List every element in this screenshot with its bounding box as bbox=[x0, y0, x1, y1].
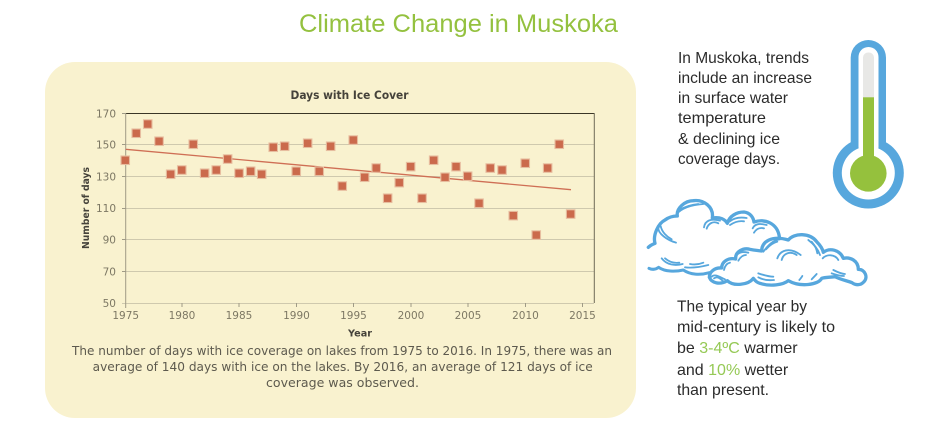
y axis labels: 110 bbox=[96, 203, 116, 215]
scatter chart: days with ice cover bbox=[81, 108, 596, 340]
text block: mid-century outlook: mid-century is likely to bbox=[677, 319, 835, 336]
y axis labels: 150 bbox=[96, 140, 116, 152]
text block: Muskoka trends bbox=[678, 50, 812, 168]
text block: Muskoka trends: temperature bbox=[678, 110, 766, 127]
text block: mid-century outlook: and 10% wetter bbox=[677, 362, 789, 379]
x axis labels: 1985 bbox=[226, 310, 252, 322]
text block: mid-century outlook: than present. bbox=[677, 382, 769, 399]
x axis labels: 1975 bbox=[112, 310, 139, 322]
icon: clouds bbox=[648, 201, 866, 285]
y axis labels: 130 bbox=[96, 172, 116, 184]
y axis labels: 170 bbox=[96, 108, 116, 120]
chart caption: The number of days with ice coverage on lakes from 1975 to 2016. In 1975, there was an bbox=[71, 344, 612, 358]
x axis labels: 1990 bbox=[283, 310, 310, 322]
trend line bbox=[126, 149, 571, 190]
chart caption bbox=[71, 344, 612, 390]
chart caption: average of 140 days with ice on the lakes. By 2016, an average of 121 days of ice bbox=[93, 360, 593, 374]
chart title: Days with Ice Cover bbox=[290, 88, 409, 102]
text block: Muskoka trends: in surface water bbox=[678, 90, 789, 107]
text block: Muskoka trends: & declining ice bbox=[678, 131, 780, 148]
text block: Muskoka trends: include an increase bbox=[678, 70, 812, 87]
x axis labels: 2010 bbox=[512, 310, 539, 322]
y axis labels: 90 bbox=[103, 234, 116, 246]
x axis labels: 2000 bbox=[398, 310, 424, 322]
x axis title: Year bbox=[347, 328, 372, 340]
text block: mid-century outlook: be 3-4ºC warmer bbox=[677, 340, 798, 357]
data markers bbox=[121, 120, 575, 239]
title: Climate Change in Muskoka bbox=[299, 10, 618, 38]
text block: mid-century outlook: The typical year by bbox=[677, 298, 807, 316]
text block: Muskoka trends: coverage days. bbox=[678, 151, 780, 168]
text block: mid-century outlook bbox=[677, 298, 835, 399]
x axis labels: 1980 bbox=[169, 310, 195, 322]
y axis labels: 70 bbox=[103, 266, 116, 278]
chart caption: coverage was observed. bbox=[266, 376, 419, 390]
text block: Muskoka trends: In Muskoka, trends bbox=[678, 50, 809, 67]
panel: ice cover chart and caption bbox=[45, 62, 636, 418]
y axis labels: 50 bbox=[103, 298, 116, 310]
x axis labels: 2005 bbox=[455, 310, 481, 322]
y axis labels bbox=[96, 108, 116, 310]
x axis labels bbox=[112, 310, 596, 322]
x axis labels: 1995 bbox=[340, 310, 367, 322]
icon: thermometer bbox=[833, 40, 904, 208]
x axis labels: 2015 bbox=[569, 310, 596, 322]
y axis title: Number of days bbox=[81, 167, 92, 249]
